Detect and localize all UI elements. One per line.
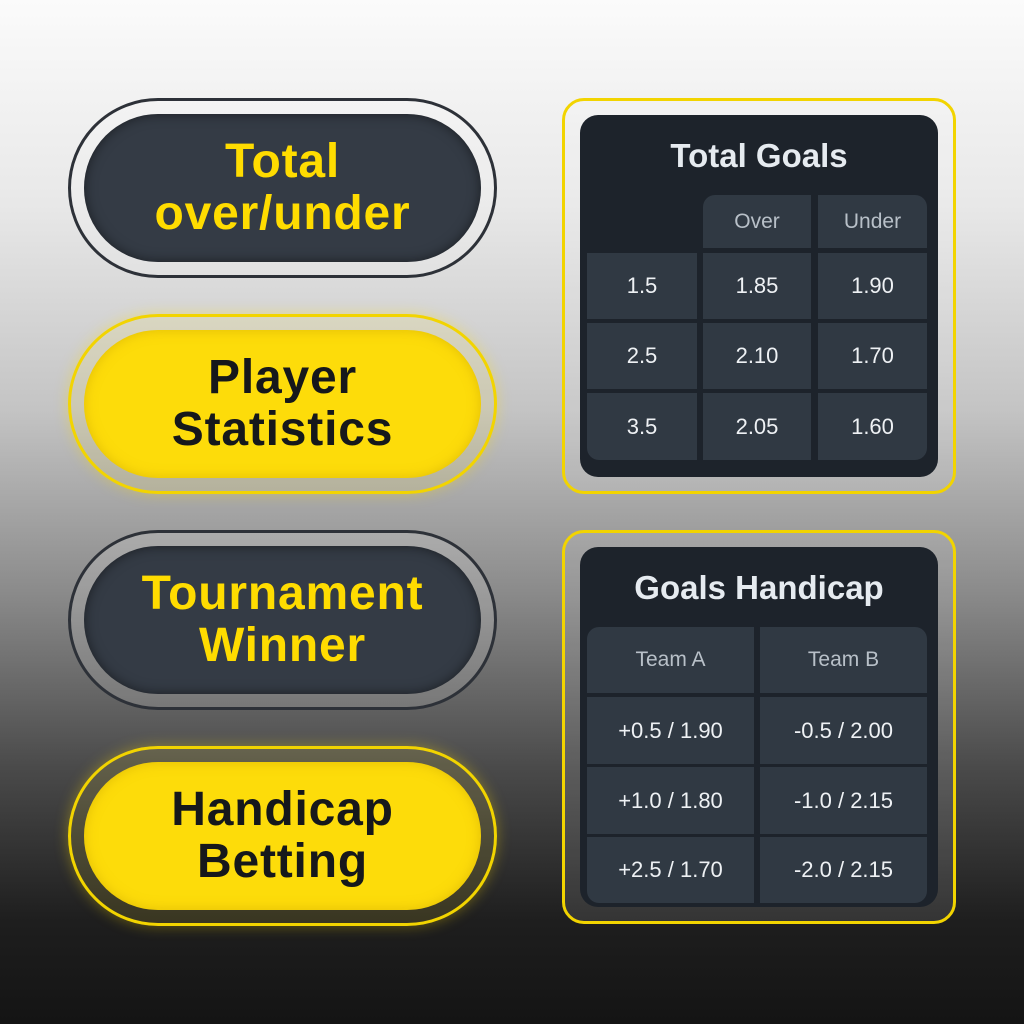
panel: Goals Handicap table	[562, 530, 956, 924]
panel: Total Goals table: 1.70	[851, 343, 894, 368]
panel: Goals Handicap table: +2.5 / 1.70	[618, 857, 723, 882]
panel: Total Goals table: 3.5	[627, 414, 657, 438]
title: Goals Handicap: Goals Handicap	[634, 569, 884, 606]
pill: Total over/under	[68, 98, 497, 278]
panel: Goals Handicap table: +1.0 / 1.80	[618, 788, 723, 812]
panel: Goals Handicap table: Team B	[808, 648, 879, 671]
panel: Total Goals table: Over	[734, 210, 780, 232]
panel: Goals Handicap table: Team A	[635, 648, 706, 671]
pill: Tournament Winner	[68, 530, 497, 710]
pill: Tournament Winner: Winner	[199, 619, 366, 672]
panel: Total Goals table: 2.5	[627, 343, 657, 368]
pill: Handicap Betting	[68, 746, 497, 926]
panel: Total Goals table: 1.90	[851, 273, 894, 298]
pill: Player Statistics: Player	[208, 351, 357, 404]
panel: Total Goals table: Under	[844, 210, 901, 232]
pill: Tournament Winner: Tournament	[142, 567, 423, 620]
pill: Handicap Betting: Betting	[197, 835, 368, 888]
panel: Total Goals table: 2.05	[736, 414, 778, 438]
table cells	[587, 195, 927, 460]
panel: Goals Handicap table: -2.0 / 2.15	[794, 857, 893, 882]
pill: Player Statistics: Statistics	[172, 403, 393, 456]
panel: Goals Handicap table: +0.5 / 1.90	[618, 718, 723, 742]
panel: Total Goals table: 1.85	[736, 273, 778, 298]
panel: Total Goals table: 1.5	[627, 273, 657, 298]
title: Total Goals: Total Goals	[670, 137, 848, 174]
pill: Handicap Betting: Handicap	[171, 783, 394, 836]
panel: Goals Handicap table: -0.5 / 2.00	[794, 718, 893, 742]
pill: Player Statistics	[68, 314, 497, 494]
panel: Total Goals table	[562, 98, 956, 494]
pill: Total over/under: over/under	[154, 187, 411, 240]
pill: Total over/under: Total	[225, 135, 340, 188]
panel: Goals Handicap table: -1.0 / 2.15	[794, 788, 893, 812]
panel: Total Goals table: 2.10	[736, 343, 778, 368]
panel: Total Goals table: 1.60	[851, 414, 894, 438]
table cells	[587, 627, 927, 903]
